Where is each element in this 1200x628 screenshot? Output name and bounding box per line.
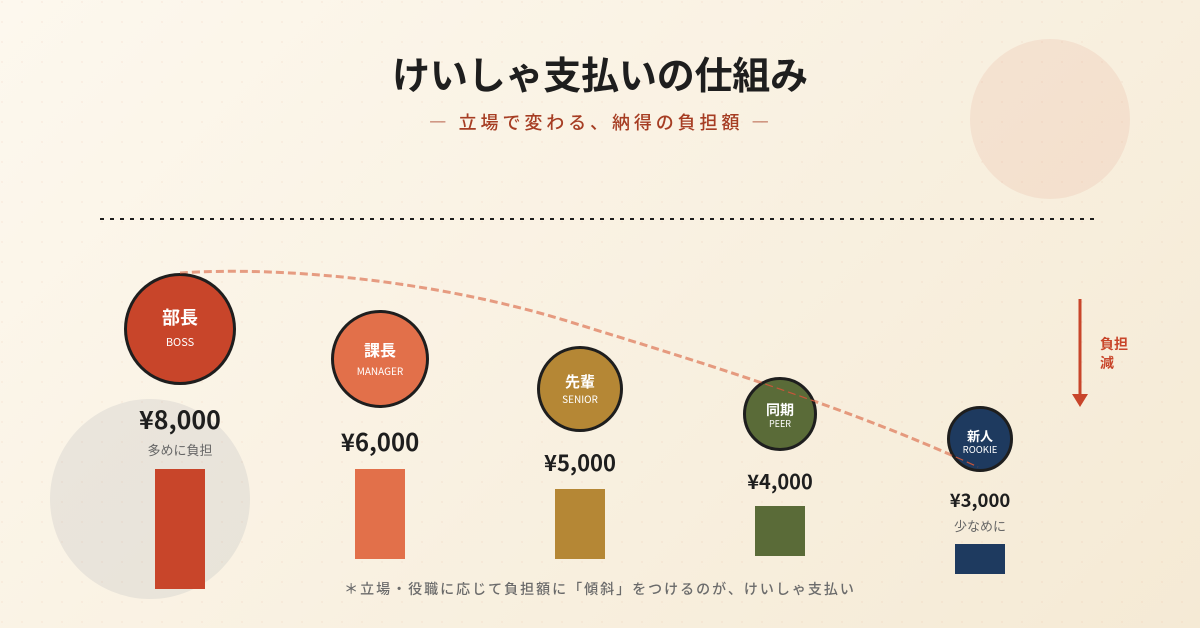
senior circle: 先輩 [565,371,595,392]
arrow label: 負担 [1100,334,1128,354]
boss note: 多めに負担 [147,440,212,459]
peer amount: ¥4,000 [747,466,813,495]
footnote: ＊立場・役職に応じて負担額に「傾斜」をつけるのが、けいしゃ支払い [344,579,856,599]
manager circle [331,310,429,408]
senior circle: SENIOR [562,391,598,406]
subtitle: — 立場で変わる、納得の負担額 — [429,109,773,135]
arrow label: 減 [1100,352,1114,372]
rookie circle [947,406,1013,472]
manager amount: ¥6,000 [341,423,419,458]
decorative circle bottom left [50,399,250,599]
rookie bar [955,544,1005,574]
peer bar [755,506,805,556]
person: manager [331,310,429,559]
person: senior [537,346,623,559]
arrow label [1100,334,1128,372]
arrow: burden decreases [1072,299,1088,407]
rookie note: 少なめに [954,516,1006,535]
peer circle: PEER [769,417,791,430]
person: boss [124,273,236,589]
senior circle [537,346,623,432]
manager circle: MANAGER [357,363,403,378]
curve traces visible over circles [180,273,978,468]
manager bar [355,469,405,559]
decorative circle top right [970,39,1130,199]
boss amount: ¥8,000 [139,401,221,437]
peer circle [743,377,817,451]
person: peer [743,377,817,556]
boss circle [124,273,236,385]
rookie amount: ¥3,000 [950,487,1010,513]
rookie circle: 新人 [967,426,993,445]
peer circle: 同期 [766,400,794,420]
rookie circle: ROOKIE [963,442,997,456]
boss circle: 部長 [162,304,198,330]
senior bar [555,489,605,559]
title: けいしゃ支払いの仕組み [392,45,808,100]
boss circle: BOSS [166,334,194,350]
senior amount: ¥5,000 [544,446,616,478]
boss bar [155,469,205,589]
manager circle: 課長 [364,337,396,361]
person: rookie [947,406,1013,574]
